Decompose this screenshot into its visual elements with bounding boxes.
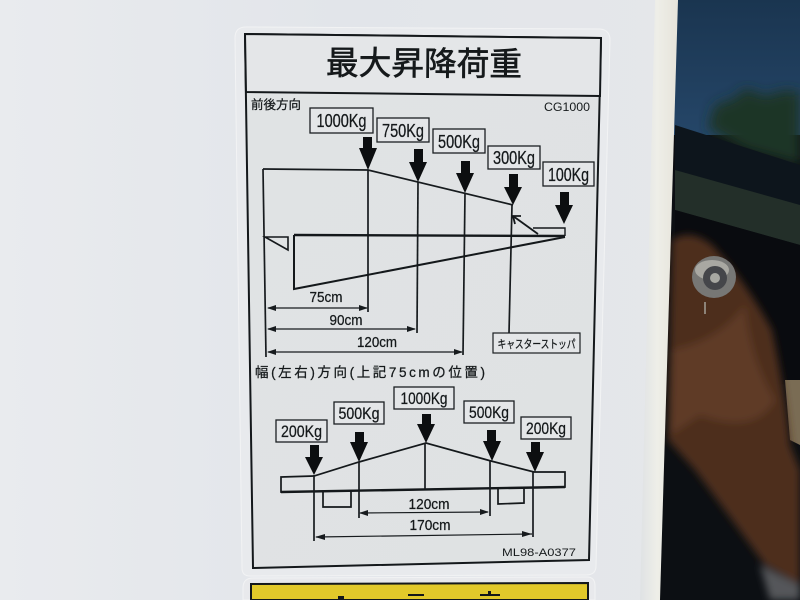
sticker backing — [235, 27, 610, 576]
arrow: 100Kg — [555, 192, 573, 224]
panel: yellow caution sticker (cropped) — [243, 577, 595, 600]
load label: 750Kg: 750Kg — [382, 121, 424, 141]
position lines — [314, 443, 533, 541]
window reflection scene — [660, 0, 800, 600]
load label: 100Kg: 100Kg — [548, 165, 589, 185]
chart: width load diagram — [276, 387, 571, 541]
part number: ML98-A0377 — [502, 547, 576, 559]
arrow: center 1000Kg — [417, 414, 435, 443]
left support box — [323, 491, 351, 507]
lift platform side view — [294, 228, 565, 289]
load label: left 500Kg: 500Kg — [338, 404, 380, 423]
arrow: 500Kg — [456, 161, 474, 193]
caster stopper label: キャスターストッパ — [498, 338, 576, 351]
arrow: left 500Kg — [350, 432, 368, 462]
caster stopper label — [493, 333, 580, 353]
load profile outline — [263, 169, 513, 205]
dimension: 90cm — [267, 312, 416, 332]
model code: CG1000 — [544, 100, 590, 114]
platform front view with load profile — [281, 443, 565, 492]
load label: 300Kg: 300Kg — [493, 148, 535, 168]
load label: 1000Kg — [310, 108, 373, 133]
dimension: 90cm: 90cm — [330, 312, 362, 329]
arrow: 300Kg — [504, 174, 522, 205]
dimension: 120cm: 120cm — [357, 334, 397, 351]
dimension: 170cm: 170cm — [410, 517, 450, 534]
left datum line — [263, 169, 266, 357]
panel: load rating sticker — [235, 27, 610, 576]
arrow: 750Kg — [409, 149, 427, 182]
load label: 500Kg: 500Kg — [438, 132, 480, 152]
dimension: 120cm — [267, 334, 463, 355]
dimension: 170cm — [315, 517, 532, 540]
heading: width direction: 幅(左右)方向(上記75cmの位置) — [255, 365, 485, 380]
arrow: left 200Kg — [305, 445, 323, 475]
wedge — [265, 237, 288, 250]
load label: 1000Kg: 1000Kg — [316, 111, 366, 131]
caster stopper pointer — [513, 216, 538, 234]
dimension: 120cm: 120cm — [408, 496, 450, 513]
title band — [245, 34, 601, 96]
dimension: 75cm — [267, 289, 368, 311]
load label: 750Kg — [377, 118, 429, 142]
white door trim — [640, 0, 678, 600]
load label: right 200Kg: 200Kg — [526, 419, 566, 438]
arrow: right 500Kg — [483, 430, 501, 461]
load label: 100Kg — [543, 162, 594, 186]
dimension: 120cm — [359, 496, 489, 516]
dimension: 75cm: 75cm — [310, 289, 342, 306]
load label: center 1000Kg: 1000Kg — [400, 389, 448, 408]
arrow: right 200Kg — [526, 442, 544, 472]
load label: right 500Kg: 500Kg — [469, 403, 509, 422]
icon: metal screw reflected in window — [692, 256, 736, 314]
load label: 500Kg — [433, 129, 485, 153]
heading: front-rear direction: 前後方向 — [251, 97, 301, 112]
sticker frame — [245, 34, 601, 568]
cropped caution text strokes — [338, 591, 500, 600]
right support box — [498, 488, 524, 504]
title: 最大昇降荷重 — [326, 44, 522, 83]
chart: front-rear load diagram — [263, 108, 594, 357]
position lines — [368, 170, 512, 355]
load label: left 200Kg: 200Kg — [281, 422, 322, 441]
arrow: 1000Kg — [359, 137, 377, 170]
